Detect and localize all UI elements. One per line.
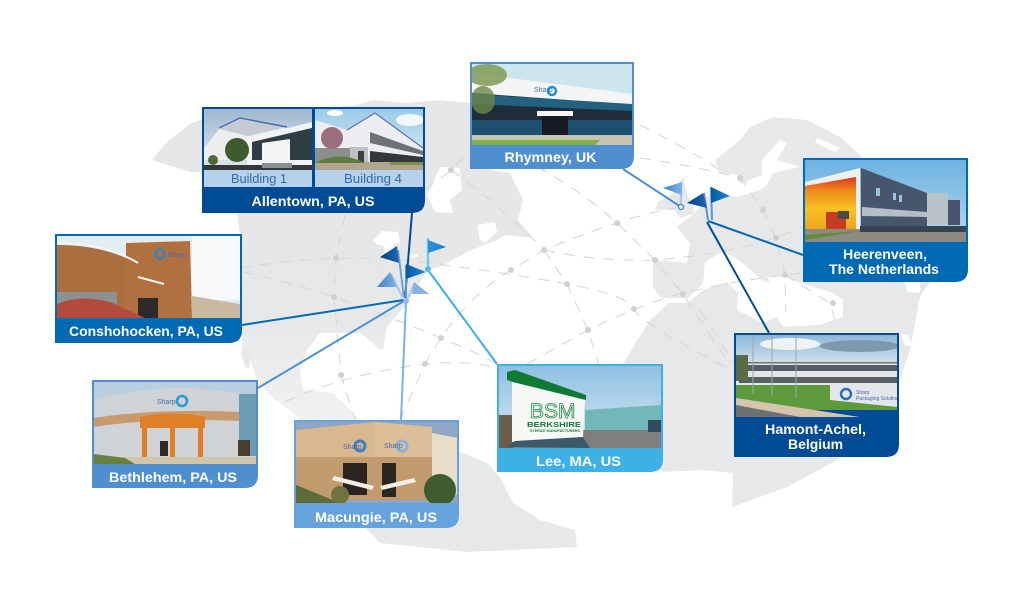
land: North America (152, 100, 533, 440)
photo: Sharp (384, 443, 403, 450)
photo: Sharp (343, 444, 362, 451)
card: Rhymney (467, 62, 634, 169)
land: Baja peninsula (241, 343, 250, 368)
photo: Sharp (856, 390, 870, 396)
card: Lee (497, 364, 663, 472)
location name line 1: Heerenveen, (843, 246, 927, 262)
photo (467, 64, 633, 145)
water: bays on the east edge (900, 280, 920, 347)
world map (152, 100, 930, 552)
photo: Sharp (157, 399, 176, 406)
flag: Rhymney (663, 182, 684, 210)
flag: Heerenveen (711, 187, 730, 220)
water: White Sea (815, 138, 840, 152)
flag: Lee (425, 238, 446, 272)
location name: Allentown, PA, US (252, 193, 374, 209)
flag: Conshohocken (406, 264, 426, 298)
label: Building 4: Building 4 (344, 171, 402, 186)
card: Macungie (294, 420, 459, 528)
location name: Macungie, PA, US (315, 509, 437, 525)
photo: Building 4 (315, 109, 424, 170)
location name: Bethlehem, PA, US (109, 469, 237, 485)
water: Great Lakes (373, 231, 418, 260)
photo (57, 236, 240, 318)
card background (497, 364, 663, 472)
flags: Pennsylvania cluster (377, 246, 429, 304)
label strip backgrounds (204, 170, 423, 187)
location name: Lee, MA, US (536, 453, 621, 469)
location name line 2: The Netherlands (829, 261, 939, 277)
flag: Macungie (408, 282, 429, 298)
water: Gulf of St Lawrence (477, 222, 497, 243)
land: South America (360, 430, 577, 552)
water: Hudson Bay (427, 167, 462, 213)
photo (499, 366, 661, 448)
card background (294, 420, 459, 528)
land: Europe, Africa and Asia (620, 117, 930, 507)
photo: Packaging Solutions (856, 396, 902, 402)
land: United Kingdom (655, 177, 695, 218)
card: Hamont-Achel (734, 333, 902, 457)
label: Building 1: Building 1 (231, 171, 287, 186)
flag: Bethlehem (377, 272, 403, 298)
flag: Hamont-Achel (687, 193, 708, 220)
card: Allentown (202, 107, 425, 213)
photo: BSM (530, 400, 576, 423)
water: Baltic Sea (745, 140, 800, 185)
divider (312, 107, 314, 187)
photo (296, 422, 458, 506)
photo (93, 382, 257, 464)
dashed network grid (240, 125, 880, 420)
card background (202, 107, 425, 213)
connector lines (242, 169, 803, 420)
photo (805, 160, 966, 242)
photo (736, 335, 902, 417)
card background (734, 333, 899, 457)
photo: BERKSHIRE (527, 422, 581, 429)
card background (470, 62, 634, 169)
card: Conshohocken (55, 234, 242, 343)
card background (55, 234, 242, 343)
photo: Sharp (534, 87, 553, 94)
location name line 2: Belgium (788, 436, 843, 452)
photo: STERILE MANUFACTURERS (530, 429, 581, 433)
card background (803, 158, 968, 282)
photo: Sharp (168, 252, 187, 259)
location name: Conshohocken, PA, US (69, 323, 223, 339)
flags: Europe (663, 182, 730, 220)
hub node (403, 298, 409, 304)
location name: Rhymney, UK (504, 149, 596, 165)
card: Heerenveen (803, 158, 968, 282)
card background (92, 380, 258, 488)
flag: Allentown (380, 246, 404, 298)
location name line 1: Hamont-Achel, (765, 421, 866, 437)
land: Italy (733, 245, 770, 283)
water: Mediterranean (655, 252, 843, 327)
card: Bethlehem (92, 380, 258, 488)
photo: Building 1 (204, 109, 312, 170)
